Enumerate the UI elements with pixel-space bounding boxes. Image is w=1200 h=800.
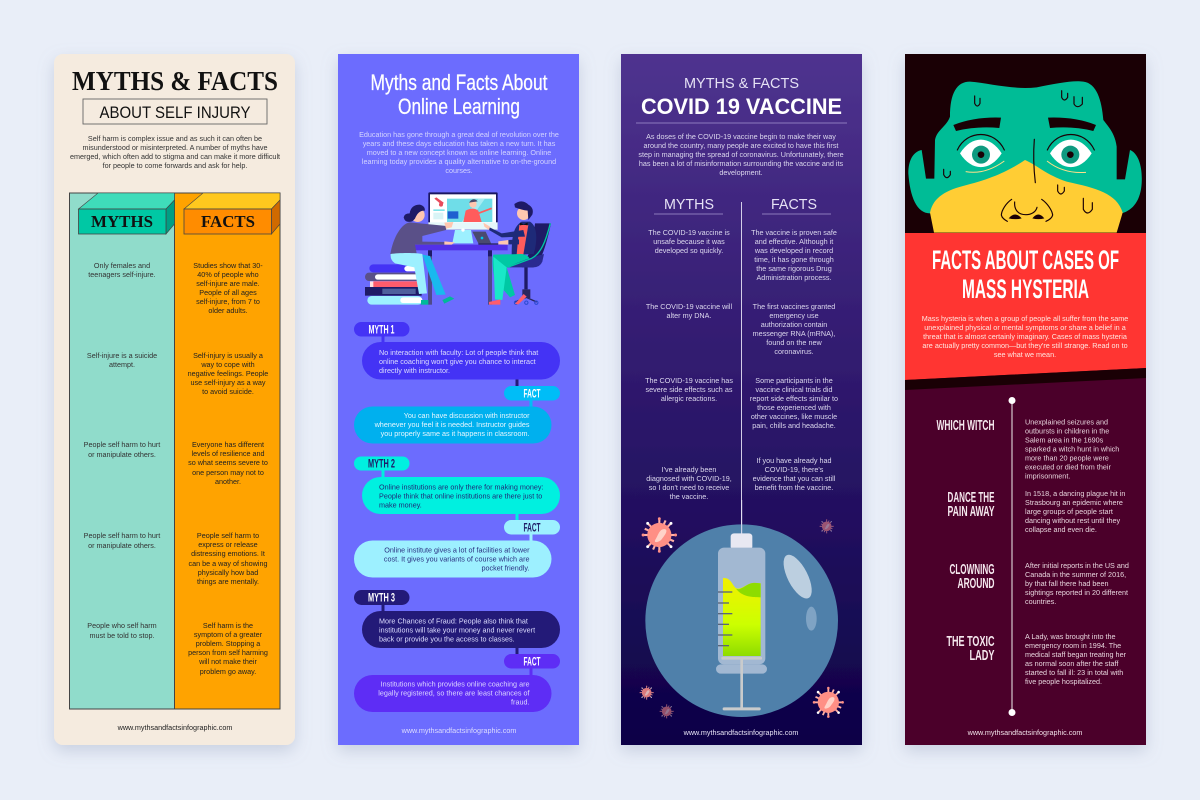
column heading: myths: MYTHS bbox=[664, 197, 714, 213]
pill: myth 3: MYTH 3 bbox=[368, 590, 395, 604]
books bbox=[365, 264, 422, 305]
bubble: fact 2 text: pocket friendly. bbox=[481, 564, 530, 572]
myths column text: developed so quickly. bbox=[655, 246, 723, 255]
bubble: myth 1 text: No interaction with faculty: Lot of people think that bbox=[379, 348, 538, 357]
myths column text: Self-injure is a suicide bbox=[87, 351, 157, 360]
myths column text: unsafe because it was bbox=[653, 237, 725, 246]
pill: fact 1: FACT bbox=[524, 386, 541, 400]
bubble: fact 1 text: you properly same as it happens in classroom. bbox=[381, 429, 530, 438]
man on chair bbox=[483, 201, 551, 305]
intro text: Mass hysteria is when a group of people all suffer from the same bbox=[922, 314, 1128, 323]
footer url: www.mythsandfactsinfographic.com bbox=[967, 728, 1082, 737]
bubble: myth 2 text: make money. bbox=[379, 500, 422, 510]
myth and fact flow: item 1 bbox=[354, 322, 560, 444]
facts column text: will not make their bbox=[198, 657, 257, 666]
bubble: myth 1 text: online coaching won't give you chance to interact bbox=[379, 357, 536, 366]
timeline descriptions: Canada in the summer of 2016, bbox=[1025, 570, 1126, 579]
facts column text: Studies show that 30- bbox=[193, 261, 263, 270]
myths column text: diagnosed with COVID-19, bbox=[646, 474, 732, 483]
intro text: learning today provides a quality alternative to on-the-ground bbox=[362, 157, 556, 166]
timeline descriptions: as normal soon after the staff bbox=[1025, 659, 1119, 668]
myths column text: People who self harm bbox=[87, 621, 157, 630]
timeline descriptions: Salem area in the 1690s bbox=[1025, 436, 1104, 444]
intro text bbox=[359, 130, 559, 175]
timeline descriptions: Strasbourg an epidemic where bbox=[1025, 498, 1123, 507]
bubble: fact 3 text: Institutions which provides online coaching are bbox=[381, 680, 530, 688]
facts column text: problem. Stopping a bbox=[196, 639, 261, 648]
bubble: fact 1 text: whenever you feel it is needed. Instructor guides bbox=[374, 420, 530, 429]
facts column text bbox=[188, 261, 268, 676]
timeline descriptions: In 1518, a dancing plague hit in bbox=[1025, 489, 1125, 498]
intro text: unexplained physical or mental symptoms or share a belief in a bbox=[924, 323, 1127, 332]
facts column text: express or release bbox=[198, 540, 258, 549]
facts column text: was developed in record bbox=[754, 246, 833, 255]
timeline headings: THE TOXIC bbox=[946, 634, 995, 650]
facts column text: Self harm is the bbox=[203, 621, 253, 630]
facts column text: authorization contain bbox=[761, 320, 827, 329]
facts column text: 40% of people who bbox=[197, 270, 259, 279]
facts column text: way to cope with bbox=[200, 360, 255, 369]
bubble: fact 2 text: Online institute gives a lot of facilities at lower bbox=[384, 546, 530, 554]
intro text bbox=[638, 132, 844, 177]
timeline headings: AROUND bbox=[958, 576, 994, 592]
column heading: facts: FACTS bbox=[771, 197, 817, 213]
timeline descriptions: large groups of people start bbox=[1025, 507, 1113, 516]
myths column text bbox=[84, 261, 160, 640]
timeline descriptions: A Lady, was brought into the bbox=[1025, 632, 1116, 641]
monitor bbox=[428, 192, 498, 243]
pill: myth 3 bbox=[354, 590, 410, 605]
facts column text: COVID-19, there's bbox=[765, 465, 824, 474]
bubble: fact 2 text bbox=[354, 540, 552, 578]
facts column text: The vaccine is proven safe bbox=[751, 228, 837, 237]
myths column text: I've already been bbox=[662, 465, 716, 474]
woman bbox=[390, 205, 455, 305]
myths column text: so I don't need to receive bbox=[649, 483, 729, 492]
myths column text: attempt. bbox=[109, 360, 135, 369]
facts column text: If you have already had bbox=[756, 456, 832, 465]
facts column text: another. bbox=[215, 477, 241, 486]
myths column text: teenagers self-injure. bbox=[88, 270, 156, 279]
timeline headings: PAIN AWAY bbox=[948, 504, 995, 520]
intro text: emerged, which often add to stigma and can make it more difficult bbox=[70, 152, 280, 161]
footer url: www.mythsandfactsinfographic.com bbox=[117, 723, 232, 732]
intro text: Education has gone through a great deal of revolution over the bbox=[359, 130, 559, 139]
title: online learning: Myths and Facts About bbox=[370, 70, 548, 95]
timeline descriptions bbox=[1025, 418, 1129, 686]
pill: fact 1 bbox=[504, 386, 560, 400]
heading bbox=[932, 245, 1119, 304]
myths column text: The COVID-19 vaccine is bbox=[648, 228, 730, 237]
pill: fact 3: FACT bbox=[524, 654, 541, 668]
timeline descriptions: medical staff began treating her bbox=[1025, 650, 1127, 659]
panel: self injury myths and facts bbox=[54, 54, 295, 745]
illustration: syringe in circle with viruses bbox=[640, 500, 844, 718]
pill: fact 2 bbox=[504, 520, 560, 534]
facts column text: report side effects similar to bbox=[750, 394, 838, 403]
facts column text: vaccine clinical trials did bbox=[755, 385, 833, 394]
timeline descriptions: by that fall there had been bbox=[1025, 579, 1108, 588]
facts column text: People of all ages bbox=[199, 288, 257, 297]
myths column text: People self harm to hurt bbox=[84, 531, 160, 540]
bubble: myth 2 text bbox=[362, 477, 560, 514]
intro text bbox=[70, 134, 280, 170]
myths column text: severe side effects such as bbox=[646, 385, 733, 394]
facts column text: time, it has gone through bbox=[754, 255, 834, 264]
facts column text: benefit from the vaccine. bbox=[755, 483, 833, 492]
facts column text: those experienced with bbox=[757, 403, 831, 412]
bubble: fact 1 text: You can have discussion with instructor bbox=[404, 411, 530, 420]
facts column text: the same rigorous Drug bbox=[756, 264, 832, 273]
title: myths and facts: MYTHS & FACTS bbox=[72, 66, 278, 96]
myths column text: The COVID-19 vaccine has bbox=[645, 376, 733, 385]
facts column text: Self-injury is usually a bbox=[193, 351, 264, 360]
facts column text bbox=[750, 228, 838, 492]
intro text: see what we mean. bbox=[994, 350, 1056, 359]
intro text: development. bbox=[719, 168, 763, 177]
facts column text: things are mentally. bbox=[197, 577, 259, 586]
facts column text: messenger RNA (mRNA), bbox=[753, 329, 835, 338]
intro text: As doses of the COVID-19 vaccine begin to make their way bbox=[646, 132, 836, 141]
facts column text: emergency use bbox=[769, 311, 819, 320]
panel: mass hysteria bbox=[905, 54, 1146, 745]
facts column text: so what seems severe to bbox=[188, 458, 268, 467]
bubble: myth 3 text: institutions will take your money and never revert bbox=[379, 626, 535, 634]
facts column text: self-injure, from 7 to bbox=[196, 297, 260, 306]
timeline headings: LADY bbox=[970, 648, 995, 664]
facts column text: one person may not to bbox=[192, 468, 264, 477]
myths column text: The COVID-19 vaccine will bbox=[646, 302, 733, 311]
bubble: fact 2 text: cost. It gives you variants of course which are bbox=[384, 554, 530, 564]
timeline headings: CLOWNING bbox=[950, 562, 994, 578]
facts column text: symptom of a greater bbox=[194, 630, 263, 639]
myths column text: alter my DNA. bbox=[667, 311, 711, 320]
pill: myth 1 bbox=[354, 322, 410, 336]
timeline descriptions: sparked a witch hunt in which bbox=[1025, 444, 1119, 454]
subtitle box: about self injury bbox=[83, 99, 267, 124]
facts column text: pain, chills and headache. bbox=[752, 421, 836, 430]
intro text: moved to a new concept known as online learning. Online bbox=[367, 148, 551, 157]
timeline descriptions: five people hospitalized. bbox=[1025, 677, 1102, 686]
timeline descriptions: dancing without rest until they bbox=[1025, 516, 1120, 525]
facts column text: Some participants in the bbox=[755, 376, 833, 385]
intro text: Self harm is complex issue and as such it can often be bbox=[88, 134, 262, 143]
panel: online learning bbox=[338, 54, 579, 745]
myths column text bbox=[645, 228, 733, 501]
column header: myths: MYTHS bbox=[91, 212, 153, 231]
pill: fact 2: FACT bbox=[524, 520, 541, 534]
facts column text: physically how bad bbox=[198, 568, 258, 577]
desk bbox=[411, 232, 508, 305]
panel: covid 19 vaccine bbox=[621, 54, 862, 745]
heading: MASS HYSTERIA bbox=[962, 274, 1089, 304]
facts column text: found on the new bbox=[766, 338, 822, 347]
column header: facts bbox=[184, 193, 280, 234]
timeline bbox=[1008, 397, 1016, 716]
column header: myths bbox=[78, 193, 174, 234]
illustration: two people at a desk with monitor bbox=[365, 192, 551, 305]
timeline descriptions: countries. bbox=[1025, 597, 1056, 606]
viruses bbox=[640, 517, 844, 718]
footer url: www.mythsandfactsinfographic.com bbox=[683, 728, 798, 737]
intro text: has been a lot of misinformation surrounding the vaccine and its bbox=[639, 159, 844, 168]
myth and fact flow: item 2 bbox=[354, 456, 560, 578]
bubble: myth 2 text: Online institutions are only there for making money: bbox=[379, 482, 544, 492]
intro text: years and these days education has taken a new turn. It has bbox=[363, 139, 556, 148]
table columns bbox=[70, 193, 280, 709]
intro text: courses. bbox=[445, 166, 473, 175]
facts column text: and effective. Although it bbox=[755, 237, 833, 246]
footer url: www.mythsandfactsinfographic.com bbox=[401, 726, 516, 735]
myths column text: or manipulate others. bbox=[88, 541, 156, 550]
facts column text: levels of resilience and bbox=[191, 449, 265, 458]
facts column text: People self harm to bbox=[197, 531, 259, 540]
bubble: myth 3 text bbox=[362, 611, 560, 648]
myths column text: Only females and bbox=[94, 261, 150, 270]
facts column text: can be a way of showing bbox=[188, 559, 268, 568]
title: covid 19 vaccine: MYTHS & FACTS bbox=[684, 75, 799, 92]
pill: fact 3 bbox=[504, 654, 560, 668]
facts column text: distressing emotions. It bbox=[191, 549, 265, 558]
facts column text: person from self harming bbox=[188, 648, 268, 657]
bubble: myth 1 text bbox=[362, 342, 560, 380]
intro text bbox=[922, 314, 1128, 359]
facts column text: Administration process. bbox=[756, 273, 832, 282]
title: online learning bbox=[370, 70, 548, 119]
pill: myth 1: MYTH 1 bbox=[368, 322, 395, 336]
facts column text: negative feelings. People bbox=[188, 369, 268, 378]
facts column text: Everyone has different bbox=[192, 440, 264, 449]
bubble: myth 3 text: More Chances of Fraud: People also think that bbox=[379, 616, 528, 626]
intro text: are actually pretty common—but they're still strange. Read on to bbox=[922, 341, 1128, 350]
timeline descriptions: started to fall ill: 23 in total with bbox=[1025, 668, 1123, 677]
timeline descriptions: imprisonment. bbox=[1025, 472, 1070, 480]
timeline descriptions: executed or died from their bbox=[1025, 462, 1111, 472]
bubble: fact 3 text: fraud. bbox=[511, 698, 530, 706]
timeline descriptions: collapse and even die. bbox=[1025, 525, 1097, 534]
bubble: myth 3 text: back or provide you the access to classes. bbox=[379, 634, 515, 644]
myths column text: People self harm to hurt bbox=[84, 440, 160, 449]
myth and fact flow: item 3 bbox=[354, 590, 560, 712]
facts column text: problem go away. bbox=[200, 667, 256, 676]
pill: myth 2: MYTH 2 bbox=[368, 456, 395, 470]
facts column text: coronavirus. bbox=[774, 347, 814, 356]
title: online learning: Online Learning bbox=[398, 94, 520, 119]
facts column text: older adults. bbox=[208, 306, 248, 315]
subtitle box: about self injury: ABOUT SELF INJURY bbox=[100, 104, 250, 122]
syringe bbox=[716, 500, 767, 710]
column heading: facts bbox=[762, 197, 831, 214]
myths column text: must be told to stop. bbox=[89, 631, 155, 640]
timeline descriptions: more than 20 people were bbox=[1025, 454, 1109, 462]
timeline descriptions: outbursts in children in the bbox=[1025, 426, 1109, 436]
timeline descriptions: sightings reported in 20 different bbox=[1025, 588, 1128, 597]
bubble: fact 3 text bbox=[354, 675, 552, 712]
bubble: fact 3 text: legally registered, so there are least chances of bbox=[378, 688, 530, 698]
intro text: for people to come forwards and ask for help. bbox=[103, 161, 247, 170]
title: covid 19 vaccine bbox=[641, 75, 842, 119]
intro text: step in managing the spread of coronavirus. Unfortunately, there bbox=[638, 150, 844, 159]
band and title: mass hysteria bbox=[905, 233, 1146, 390]
column heading: myths bbox=[654, 197, 723, 214]
timeline headings: WHICH WITCH bbox=[936, 418, 994, 434]
intro text: around the country, many people are excited to have this first bbox=[644, 141, 838, 150]
facts column text: self-injure are male. bbox=[196, 279, 260, 288]
intro text: misunderstood or misinterpreted. A number of myths have bbox=[83, 143, 267, 152]
timeline descriptions: After initial reports in the US and bbox=[1025, 561, 1129, 570]
myths column text: allergic reactions. bbox=[661, 394, 717, 403]
intro text: threat that is almost certainly imaginary. Cases of mass hysteria bbox=[923, 332, 1128, 341]
timeline descriptions: Unexplained seizures and bbox=[1025, 418, 1108, 426]
bubble: myth 1 text: directly with instructor. bbox=[379, 366, 450, 375]
facts column text: evidence that you can still bbox=[753, 474, 836, 483]
timeline headings: DANCE THE bbox=[948, 490, 995, 506]
timeline headings bbox=[936, 418, 995, 664]
illustration: sweating masked face bbox=[905, 54, 1146, 234]
facts column text: other vaccines, like muscle bbox=[751, 412, 837, 421]
bubble: myth 2 text: People think that online institutions are there just to bbox=[379, 492, 542, 500]
title: covid 19 vaccine: COVID 19 VACCINE bbox=[641, 94, 842, 119]
facts column text: The first vaccines granted bbox=[753, 302, 835, 311]
timeline descriptions: emergency room in 1994. The bbox=[1025, 641, 1121, 650]
myths column text: or manipulate others. bbox=[88, 450, 156, 459]
column header: facts: FACTS bbox=[201, 212, 255, 231]
facts column text: to avoid suicide. bbox=[202, 387, 254, 396]
myths column text: the vaccine. bbox=[670, 492, 708, 501]
facts column text: use self-injury as a way bbox=[190, 378, 266, 387]
bubble: fact 1 text bbox=[354, 406, 552, 444]
